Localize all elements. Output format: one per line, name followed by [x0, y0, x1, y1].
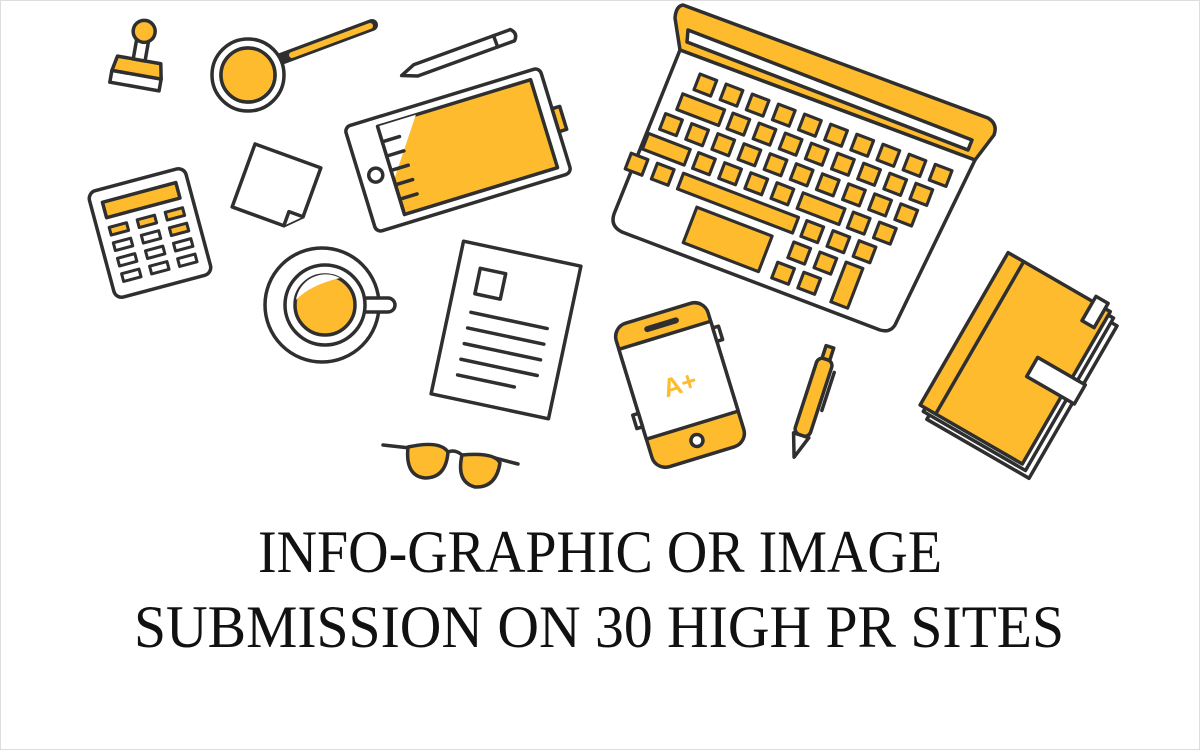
icon: stamp — [110, 16, 171, 91]
title: INFO-GRAPHIC OR IMAGE — [258, 519, 942, 585]
icon: phone — [606, 297, 754, 473]
icon: calculator — [87, 167, 213, 299]
icon: tablet — [344, 65, 579, 232]
icon: notebook — [916, 247, 1126, 479]
icon: phone: A+ — [659, 365, 700, 403]
title: SUBMISSION ON 30 HIGH PR SITES — [134, 594, 1064, 660]
icon: magnifier — [212, 25, 372, 111]
title — [134, 519, 1064, 660]
icon: laptop — [607, 5, 995, 331]
icon: coffee cup — [265, 248, 395, 362]
icon: pen — [786, 344, 841, 461]
icon: sticky note — [232, 144, 321, 231]
icon: document — [431, 241, 581, 419]
icon: glasses — [383, 444, 518, 487]
icon: pencil — [400, 28, 517, 81]
